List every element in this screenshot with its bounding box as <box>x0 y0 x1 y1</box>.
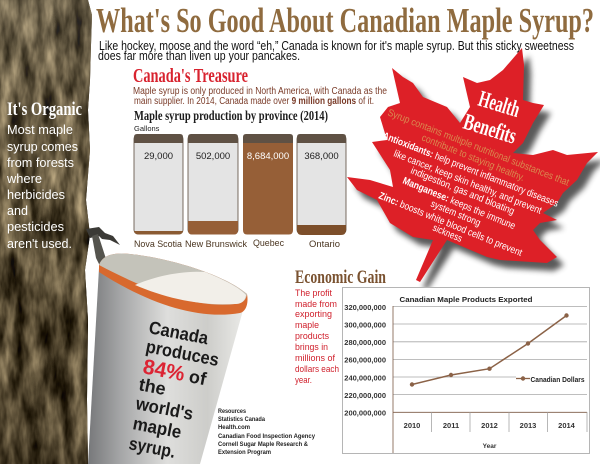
legend <box>516 372 588 386</box>
text block: economic description: dollars each <box>295 364 339 375</box>
sap bucket <box>86 227 248 464</box>
x axis labels <box>404 421 576 450</box>
resources: Health.com <box>218 424 250 431</box>
icon: spout <box>86 227 120 268</box>
callout: 84 percent: 84% of <box>141 355 209 390</box>
callout: 84 percent: the <box>137 374 168 399</box>
text block: health benefits: system strong <box>429 199 482 229</box>
text block: economic description: The profit <box>295 288 332 299</box>
y axis labels: 280,000,000 <box>344 338 386 347</box>
maple leaf <box>347 48 600 290</box>
x axis labels: 2010 <box>404 421 420 430</box>
heading: Health Benefits: Health <box>476 86 523 122</box>
text block: organic description: syrup comes <box>7 139 78 154</box>
heading: Health Benefits <box>461 86 523 149</box>
text block: organic description: pesticides <box>7 219 64 234</box>
text block: economic description: maple <box>295 320 319 331</box>
text block: health benefits: Antioxidants: help prevent inflammatory diseases <box>381 131 560 210</box>
text block: health benefits: like cancer, keep skin healthy, and prevent <box>392 149 543 217</box>
heading: Economic Gain: Economic Gain <box>295 267 386 288</box>
province labels: Ontario <box>309 239 340 250</box>
chart title: Canadian Maple Products Exported <box>400 295 533 304</box>
y axis labels: 220,000,000 <box>344 391 386 400</box>
x axis labels: 2014 <box>558 421 576 430</box>
y axis labels: 300,000,000 <box>344 320 386 330</box>
jar: New Brunswick: 502,000 <box>196 151 230 162</box>
jar: New Brunswick <box>188 134 238 234</box>
x axis labels: 2011 <box>443 421 459 430</box>
heading: Health Benefits: Benefits <box>461 109 520 149</box>
text block: health benefits: sickness <box>431 223 464 245</box>
heading: It's Organic: It's Organic <box>7 99 82 120</box>
text block: organic description: aren't used. <box>7 236 72 251</box>
text block: organic description: and <box>7 203 28 218</box>
text block: health benefits: Syrup contains multiple nutritional substances that <box>386 108 571 189</box>
resources <box>218 408 315 456</box>
axis label: gallons: Gallons <box>134 124 160 133</box>
y axis labels: 240,000,000 <box>344 374 386 382</box>
callout: 84 percent: produces <box>144 336 221 370</box>
text block: organic description: herbicides <box>7 187 65 202</box>
heading: Canada's Treasure: Canada's Treasure <box>133 65 248 87</box>
text block: economic description: products <box>295 331 329 342</box>
text block: health benefits: Zinc: boosts white blood cells to prevent <box>377 191 524 259</box>
y axis labels: 260,000,000 <box>344 356 386 364</box>
y axis labels: 320,000,000 <box>344 303 386 312</box>
x axis labels: 2013 <box>520 421 536 430</box>
callout: 84 percent: Canada <box>147 317 211 349</box>
jar: Ontario <box>297 134 346 235</box>
text block: economic description: millions of <box>295 353 335 364</box>
province labels: Quebec <box>253 238 284 249</box>
text block: health benefits: Manganese: keeps the immune <box>401 176 517 232</box>
jar: Quebec <box>243 134 293 234</box>
heading: chart title: Maple syrup production by province (2014) <box>134 109 328 124</box>
callout: 84 percent: world's <box>133 393 195 424</box>
intro text <box>98 38 574 63</box>
jar: Nova Scotia <box>134 134 183 234</box>
intro text: does far more than liven up your pancakes. <box>98 48 300 63</box>
x axis labels: Year <box>483 443 497 450</box>
resources: Canadian Food Inspection Agency <box>218 433 315 440</box>
text block: economic description: brings in <box>295 342 328 353</box>
callout: 84 percent <box>127 317 221 462</box>
jar: Nova Scotia: 29,000 <box>144 151 173 162</box>
text block: economic description: exporting <box>295 309 332 320</box>
callout: 84 percent: syrup. <box>127 433 177 462</box>
text block: health benefits: contribute to staying healthy. <box>420 133 526 184</box>
text block: treasure description <box>133 86 387 107</box>
jar: Ontario: 368,000 <box>304 151 339 162</box>
text block: economic description <box>295 288 339 386</box>
resources: Cornell Sugar Maple Research & <box>218 441 308 448</box>
resources: Resources <box>218 408 246 415</box>
text block: organic description: from forests <box>7 155 74 170</box>
text block: organic description: where <box>6 171 42 186</box>
province labels <box>134 238 340 250</box>
province labels: New Brunswick <box>185 239 247 250</box>
line chart: Canadian maple products exported <box>342 288 590 454</box>
text block: economic description: year. <box>295 375 312 386</box>
province labels: Nova Scotia <box>134 239 183 250</box>
y axis labels: 200,000,000 <box>344 408 386 418</box>
text block: health benefits: indigestion, gas and bloating <box>409 166 516 217</box>
data line <box>410 313 569 387</box>
resources: Extension Program <box>218 449 271 456</box>
legend: Canadian Dollars <box>530 377 585 384</box>
callout: 84 percent: maple <box>131 413 183 442</box>
resources: Statistics Canada <box>218 416 265 423</box>
tree trunk <box>0 0 100 464</box>
text block: economic description: made from <box>295 299 337 310</box>
jar: Quebec: 8,684,000 <box>247 151 289 162</box>
text block: organic description: Most maple <box>7 122 73 137</box>
text block: health benefits <box>377 108 571 259</box>
y axis labels <box>344 303 386 418</box>
x axis labels: 2012 <box>481 421 498 430</box>
jar chart: production by province <box>134 134 346 250</box>
text block: treasure description: Maple syrup is only produced in North America, with Canada as the <box>133 86 387 97</box>
text block: treasure description: main supplier. In 2014, Canada made over 9 million gallons of it. <box>134 96 374 107</box>
text block: organic description <box>6 122 78 251</box>
